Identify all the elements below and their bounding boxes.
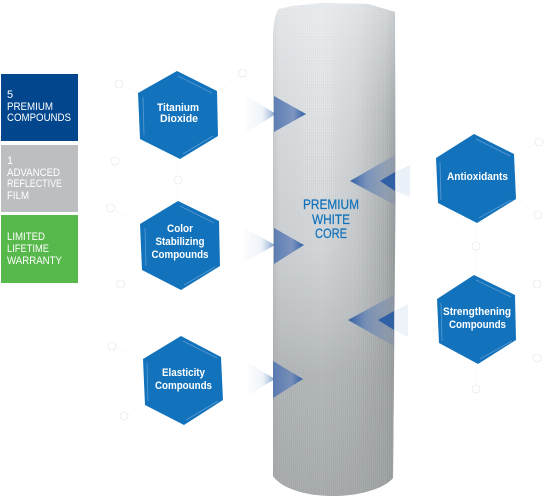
panel: limited lifetime warranty bbox=[1, 215, 78, 283]
hexagon: color stabilizing compounds bbox=[140, 201, 220, 290]
panel: advanced reflective film: FILM bbox=[7, 190, 29, 202]
panel: advanced reflective film: REFLECTIVE bbox=[7, 178, 62, 190]
hexagon: strengthening compounds bbox=[437, 275, 516, 364]
hexagon: color stabilizing compounds: Stabilizing bbox=[156, 236, 204, 248]
roll label: premium white core: PREMIUM bbox=[303, 196, 359, 212]
panel: premium compounds: 5 bbox=[7, 89, 13, 101]
panel: limited lifetime warranty: LIFETIME bbox=[7, 243, 49, 255]
panel: premium compounds: COMPOUNDS bbox=[7, 112, 71, 124]
hexagon: titanium dioxide: Titanium bbox=[157, 102, 199, 114]
panel: limited lifetime warranty: WARRANTY bbox=[7, 255, 63, 267]
white core roll bbox=[273, 3, 396, 496]
hexagon: strengthening compounds: Strengthening bbox=[443, 306, 511, 318]
arrow: antioxidants bbox=[350, 155, 410, 205]
roll label: premium white core: CORE bbox=[315, 225, 347, 241]
panel: advanced reflective film: ADVANCED bbox=[7, 167, 60, 179]
hexagon: elasticity compounds: Compounds bbox=[155, 380, 212, 392]
arrow: titanium dioxide bbox=[245, 95, 306, 133]
panel: premium compounds: PREMIUM bbox=[7, 101, 53, 113]
hexagon: titanium dioxide bbox=[138, 71, 218, 159]
roll label: premium white core: WHITE bbox=[312, 211, 350, 227]
panel: premium compounds bbox=[1, 74, 78, 141]
roll label: premium white core bbox=[303, 196, 359, 241]
hexagon: strengthening compounds: Compounds bbox=[449, 319, 506, 331]
panel: advanced reflective film bbox=[1, 145, 78, 212]
decorative connector nodes bbox=[106, 69, 543, 420]
arrow: elasticity compounds bbox=[247, 361, 303, 398]
arrow: color stabilizing compounds bbox=[243, 227, 304, 264]
panel: limited lifetime warranty: LIMITED bbox=[7, 231, 45, 243]
hexagon: color stabilizing compounds: Compounds bbox=[152, 249, 208, 261]
hexagon: elasticity compounds bbox=[143, 336, 223, 425]
panel: advanced reflective film: 1 bbox=[7, 155, 13, 167]
hexagon: antioxidants: Antioxidants bbox=[447, 171, 508, 183]
hexagon: antioxidants bbox=[436, 134, 516, 223]
arrow: strengthening compounds bbox=[348, 295, 408, 346]
hexagon: titanium dioxide: Dioxide bbox=[160, 113, 198, 125]
hexagon: color stabilizing compounds: Color bbox=[167, 223, 194, 235]
hexagon: elasticity compounds: Elasticity bbox=[162, 367, 206, 379]
